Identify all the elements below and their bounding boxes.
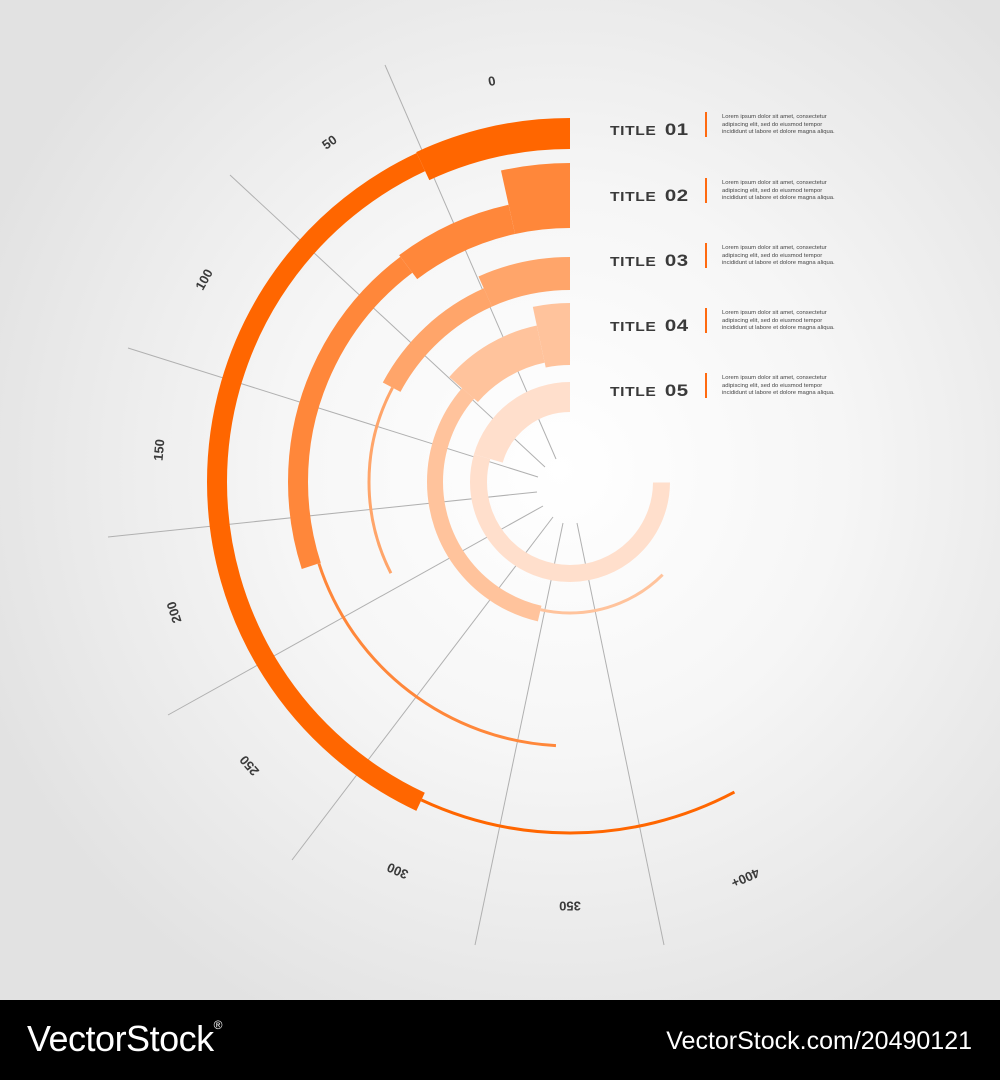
title 04 [610,308,835,335]
footer url: VectorStock.com/20490121 [666,1027,972,1055]
title 05 [610,373,835,400]
title 02: adipiscing elit, sed do eiusmod tempor [722,188,822,194]
title 03: incididunt ut labore et dolore magna aliqua. [722,260,835,266]
title 01 [610,112,835,139]
footer logo: VectorStock® [27,1018,222,1059]
footer [0,1000,1000,1080]
ring 2 [284,196,856,768]
ring 5 [478,390,662,574]
title 03 [610,243,835,270]
scale labels: 200 [164,600,184,625]
title 02: incididunt ut labore et dolore magna aliqua. [722,195,835,201]
title 02 [610,178,835,205]
title 01: TITLE 01 [610,120,689,139]
scale labels: 250 [236,753,262,779]
text: Lorem ipsum dolor sit amet, consectetur [722,375,827,381]
title 05: incididunt ut labore et dolore magna aliqua. [722,390,835,396]
scale labels: 50 [319,132,340,152]
text: Lorem ipsum dolor sit amet, consectetur [722,245,827,251]
title 02: TITLE 02 [610,186,689,205]
ring 1 [217,129,923,835]
title 05: TITLE 05 [610,381,689,400]
text: Lorem ipsum dolor sit amet, consectetur [722,114,827,120]
scale labels: 300 [385,860,411,882]
scale labels: 0 [487,73,497,89]
scale labels: 150 [151,438,167,461]
title 04: adipiscing elit, sed do eiusmod tempor [722,318,822,324]
text: Lorem ipsum dolor sit amet, consectetur [722,310,827,316]
title 04: TITLE 04 [610,316,689,335]
scale labels: 100 [192,266,216,293]
grid lines [108,65,664,945]
scale labels [151,73,762,914]
title 01: incididunt ut labore et dolore magna aliqua. [722,129,835,135]
title 03: TITLE 03 [610,251,689,270]
ring 4 [422,334,718,630]
title 05: adipiscing elit, sed do eiusmod tempor [722,383,822,389]
scale labels: 350 [559,899,581,914]
title 01: adipiscing elit, sed do eiusmod tempor [722,122,822,128]
text: Lorem ipsum dolor sit amet, consectetur [722,180,827,186]
ring 3 [362,274,778,690]
title 04: incididunt ut labore et dolore magna aliqua. [722,325,835,331]
scale labels: 400+ [729,865,762,891]
title 03: adipiscing elit, sed do eiusmod tempor [722,253,822,259]
